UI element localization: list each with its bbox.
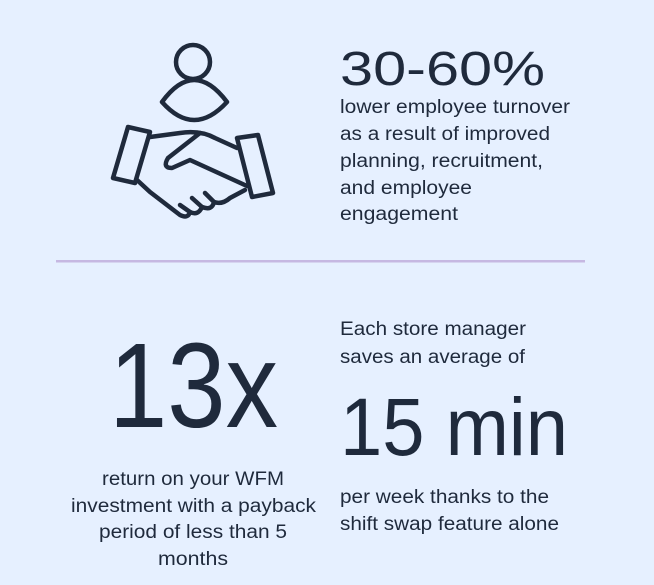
stat: 30-60% (340, 43, 571, 225)
text: turnover description: planning, recruitment, (340, 151, 543, 172)
stat: 15 min: saves an average of (340, 347, 526, 368)
stat: 13x: 13x (109, 317, 278, 453)
stat: 13x (71, 317, 317, 570)
text: ROI description: investment with a payback (71, 496, 317, 517)
text: ROI description (71, 469, 317, 570)
stat: 15 min: 15 min (340, 382, 568, 473)
stat: 15 min: shift swap feature alone (340, 514, 559, 535)
stat: 15 min (340, 319, 568, 535)
text: ROI description: return on your WFM (102, 469, 284, 490)
text: turnover description: and employee (340, 178, 472, 199)
stat: 30-60%: 30-60% (340, 43, 545, 96)
text: turnover description: lower employee turnover (340, 97, 571, 118)
text: ROI description: months (158, 549, 228, 570)
stat: 15 min: Each store manager (340, 319, 527, 340)
icon: person with handshake (113, 45, 273, 216)
stat: 15 min: per week thanks to the (340, 487, 549, 508)
text: turnover description: engagement (340, 204, 459, 225)
text: ROI description: period of less than 5 (99, 522, 287, 543)
text: turnover description (340, 97, 571, 225)
text: turnover description: as a result of improved (340, 124, 550, 145)
